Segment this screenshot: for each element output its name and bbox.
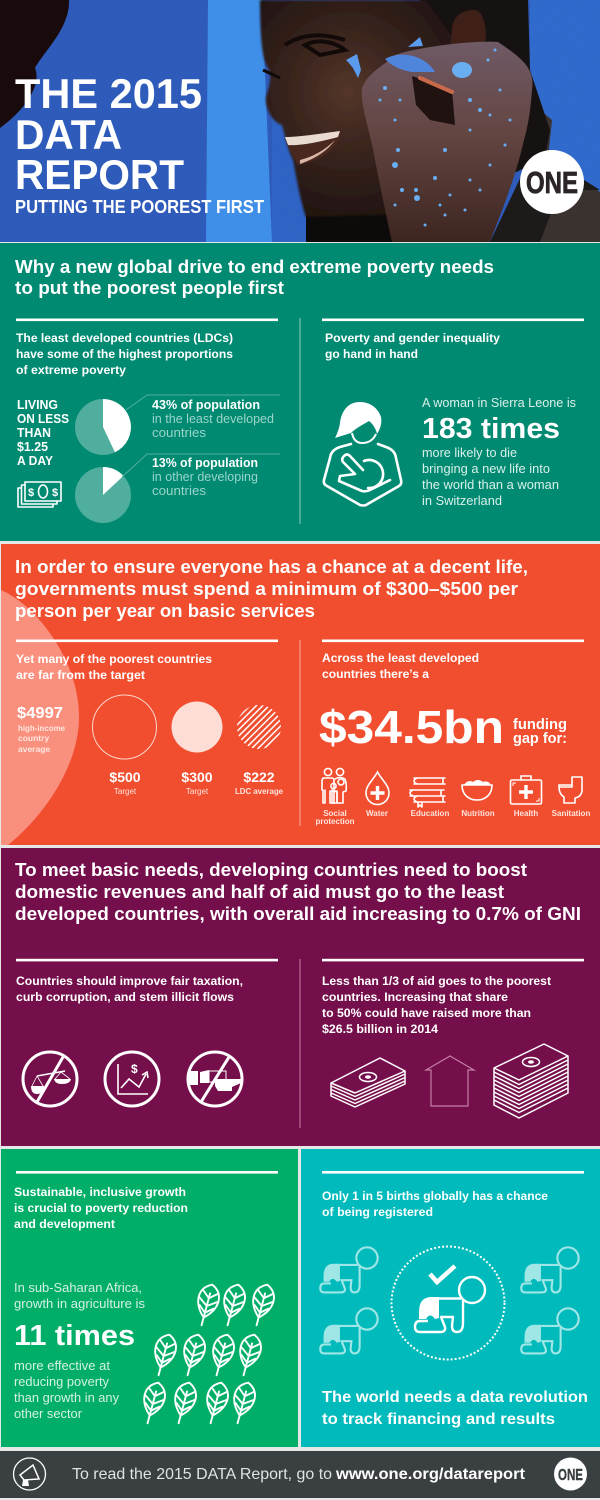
icon: social protection: protection bbox=[315, 817, 355, 826]
stat: 11 times: more effective at bbox=[14, 1358, 110, 1373]
icon: health bbox=[510, 776, 542, 818]
stat: $34.5bn funding gap: funding bbox=[513, 716, 567, 733]
hero photo bbox=[0, 0, 600, 242]
text: least developed countries: have some of the highest proportions bbox=[16, 347, 233, 361]
title: THE 2015 bbox=[15, 70, 202, 117]
icon: no illicit payments bbox=[188, 1052, 242, 1106]
stat: 183 times bbox=[422, 395, 576, 508]
stat: 183 times: in Switzerland bbox=[422, 493, 502, 508]
text: births registered: of being registered bbox=[322, 1205, 433, 1219]
text: fair taxation: curb corruption, and stem illicit flows bbox=[16, 990, 234, 1004]
label: living on less than $1.25 a day bbox=[17, 398, 69, 468]
stat: $4997 high-income average: average bbox=[18, 744, 50, 754]
section heading: person per year on basic services bbox=[15, 601, 315, 621]
chart: $222 LDC average circle: $222 bbox=[243, 769, 275, 785]
stat: 11 times: 11 times bbox=[14, 1320, 135, 1352]
stat: 43% of population: in the least developed bbox=[152, 411, 274, 426]
section heading: to put the poorest people first bbox=[15, 278, 284, 298]
icon: sanitation bbox=[552, 777, 590, 818]
icon: rising revenue chart: $ bbox=[131, 1062, 138, 1076]
panel: birth registration bbox=[301, 1149, 600, 1447]
icon group: wheat bbox=[138, 1282, 277, 1426]
icon: banknotes bbox=[18, 482, 61, 507]
section heading bbox=[15, 557, 528, 621]
text: less than 1/3 of aid: $26.5 billion in 2014 bbox=[322, 1022, 438, 1036]
title bbox=[15, 70, 202, 198]
stat: 11 times: other sector bbox=[14, 1406, 83, 1421]
label: living on less than $1.25 a day: A DAY bbox=[17, 454, 54, 468]
stat: 11 times bbox=[14, 1280, 145, 1421]
text: across the least developed countries: Across the least developed bbox=[322, 651, 479, 665]
text: fair taxation: Countries should improve fair taxation, bbox=[16, 974, 243, 988]
text: sustainable growth: is crucial to poverty reduction bbox=[14, 1201, 188, 1215]
icon: social protection bbox=[315, 768, 355, 826]
text: least developed countries bbox=[16, 331, 233, 377]
chart: $222 LDC average circle bbox=[235, 705, 284, 796]
stat: $4997 high-income average: country bbox=[18, 733, 49, 743]
text: read the report bbox=[72, 1466, 526, 1483]
text: least developed countries: The least developed countries (LDCs) bbox=[16, 331, 233, 345]
section heading: domestic revenues and half of aid must go to the least bbox=[15, 882, 504, 902]
stat: $4997 high-income average: high-income bbox=[18, 723, 65, 733]
icon: megaphone bbox=[14, 1458, 46, 1490]
section heading: Why a new global drive to end extreme poverty needs bbox=[15, 257, 494, 277]
icon: nutrition bbox=[461, 780, 495, 818]
stat: 11 times: reducing poverty bbox=[14, 1374, 109, 1389]
icon group: unregistered babies bbox=[320, 1247, 579, 1353]
stat: 13% of population: in other developing bbox=[152, 469, 258, 484]
icon: mother and baby bbox=[324, 402, 401, 506]
label: living on less than $1.25 a day: THAN bbox=[17, 426, 51, 440]
text: less than 1/3 of aid: to 50% could have raised more than bbox=[322, 1006, 531, 1020]
icon: no unfair scales bbox=[23, 1052, 77, 1106]
pie chart: 13% bbox=[75, 467, 131, 523]
title: DATA bbox=[15, 111, 122, 158]
stat: $4997 high-income average: $4997 bbox=[17, 705, 63, 722]
label: living on less than $1.25 a day: LIVING bbox=[17, 398, 58, 412]
text: poverty and gender inequality bbox=[325, 331, 500, 361]
icon: large stack of money bbox=[494, 1044, 568, 1118]
section heading: governments must spend a minimum of $300–$500 per bbox=[15, 579, 518, 599]
text: less than 1/3 of aid: Less than 1/3 of aid goes to the poorest bbox=[322, 974, 551, 988]
icon: registered baby in dotted circle bbox=[392, 1246, 504, 1360]
stat: $4997 high-income average bbox=[17, 705, 65, 754]
text: across the least developed countries bbox=[322, 651, 479, 681]
title: REPORT bbox=[15, 151, 184, 198]
section heading: To meet basic needs, developing countries need to boost bbox=[15, 860, 527, 880]
text: sustainable growth: and development bbox=[14, 1217, 115, 1231]
panel: why the poorest first bbox=[0, 243, 600, 541]
callout: data revolution: The world needs a data revolution bbox=[322, 1389, 588, 1406]
ONE logo bbox=[520, 150, 584, 214]
stat: 43% of population bbox=[152, 397, 274, 440]
section heading: In order to ensure everyone has a chance at a decent life, bbox=[15, 557, 528, 577]
icon: sanitation: Sanitation bbox=[552, 809, 590, 818]
chart: $222 LDC average circle: LDC average bbox=[235, 787, 284, 796]
label: living on less than $1.25 a day: $1.25 bbox=[17, 440, 48, 454]
text: sustainable growth: Sustainable, inclusive growth bbox=[14, 1185, 186, 1199]
stat: 183 times: bringing a new life into bbox=[422, 461, 550, 476]
panel: domestic revenues and aid bbox=[1, 848, 600, 1146]
text: births registered bbox=[322, 1189, 548, 1219]
text: sustainable growth bbox=[14, 1185, 188, 1231]
stat: $34.5bn funding gap: gap for: bbox=[513, 730, 567, 747]
text: births registered: Only 1 in 5 births globally has a chance bbox=[322, 1189, 548, 1203]
stat: 183 times: more likely to die bbox=[422, 445, 517, 460]
subtitle: PUTTING THE POOREST FIRST bbox=[15, 197, 264, 217]
icon: social protection: Social bbox=[323, 809, 347, 818]
text: far from the target: Yet many of the poorest countries bbox=[16, 652, 212, 666]
footer bar bbox=[0, 1451, 600, 1498]
chart: $500 target circle bbox=[92, 695, 156, 796]
icon: water bbox=[366, 772, 389, 818]
section heading: developed countries, with overall aid increasing to 0.7% of GNI bbox=[15, 904, 581, 924]
text: less than 1/3 of aid bbox=[322, 974, 551, 1036]
pie chart: 43% bbox=[75, 399, 131, 455]
chart: $300 target circle bbox=[172, 702, 222, 796]
section heading bbox=[15, 257, 494, 298]
ONE logo: ONE bbox=[526, 165, 578, 200]
text: least developed countries: of extreme poverty bbox=[16, 363, 126, 377]
chart: $500 target circle: Target bbox=[114, 787, 137, 796]
text: across the least developed countries: countries there’s a bbox=[322, 667, 429, 681]
section heading bbox=[15, 860, 581, 924]
stat: $34.5bn funding gap: $34.5bn bbox=[319, 701, 504, 753]
text: poverty and gender inequality: go hand in hand bbox=[325, 347, 418, 361]
stat: 13% of population: countries bbox=[152, 483, 207, 498]
stat: 183 times: 183 times bbox=[422, 413, 560, 445]
icon: water: Water bbox=[366, 809, 388, 818]
stat: 13% of population bbox=[152, 455, 258, 498]
icon: banknotes: $ bbox=[28, 487, 34, 499]
stat: 11 times: growth in agriculture is bbox=[14, 1296, 145, 1311]
text: poverty and gender inequality: Poverty and gender inequality bbox=[325, 331, 500, 345]
text: read the report: www.one.org/datareport bbox=[335, 1466, 526, 1483]
panel: basic services spending bbox=[1, 544, 600, 845]
stat: 183 times: A woman in Sierra Leone is bbox=[422, 395, 576, 410]
ONE logo small: ONE bbox=[558, 1467, 583, 1484]
stat: 11 times: In sub-Saharan Africa, bbox=[14, 1280, 142, 1295]
icon: banknotes: $ bbox=[52, 487, 58, 499]
chart: $300 target circle: Target bbox=[186, 787, 209, 796]
callout: data revolution bbox=[322, 1389, 588, 1428]
stat: 13% of population: 13% of population bbox=[152, 455, 258, 470]
stat: 11 times: than growth in any bbox=[14, 1390, 119, 1405]
text: fair taxation bbox=[16, 974, 243, 1004]
icon: small stack of money bbox=[331, 1058, 405, 1107]
text: read the report: To read the 2015 DATA Report, go to bbox=[72, 1466, 332, 1483]
panel: inclusive growth bbox=[1, 1149, 298, 1447]
icon: health: Health bbox=[514, 809, 538, 818]
stat: $34.5bn funding gap bbox=[319, 701, 567, 753]
text: less than 1/3 of aid: countries. Increasing that share bbox=[322, 990, 508, 1004]
label: living on less than $1.25 a day: ON LESS bbox=[17, 412, 69, 426]
text: far from the target: are far from the target bbox=[16, 668, 145, 682]
callout: data revolution: to track financing and results bbox=[322, 1411, 555, 1428]
text: far from the target bbox=[16, 652, 212, 682]
stat: 43% of population: 43% of population bbox=[152, 397, 260, 412]
chart: $300 target circle: $300 bbox=[181, 769, 213, 785]
icon: rising revenue chart bbox=[105, 1052, 159, 1106]
icon: education: Education bbox=[411, 809, 449, 818]
arrow: increase bbox=[426, 1056, 474, 1106]
stat: 183 times: the world than a woman bbox=[422, 477, 559, 492]
icon: education bbox=[410, 778, 449, 818]
stat: 43% of population: countries bbox=[152, 425, 207, 440]
ONE logo small bbox=[554, 1458, 587, 1490]
icon: nutrition: Nutrition bbox=[461, 809, 495, 818]
chart: $500 target circle: $500 bbox=[109, 769, 141, 785]
